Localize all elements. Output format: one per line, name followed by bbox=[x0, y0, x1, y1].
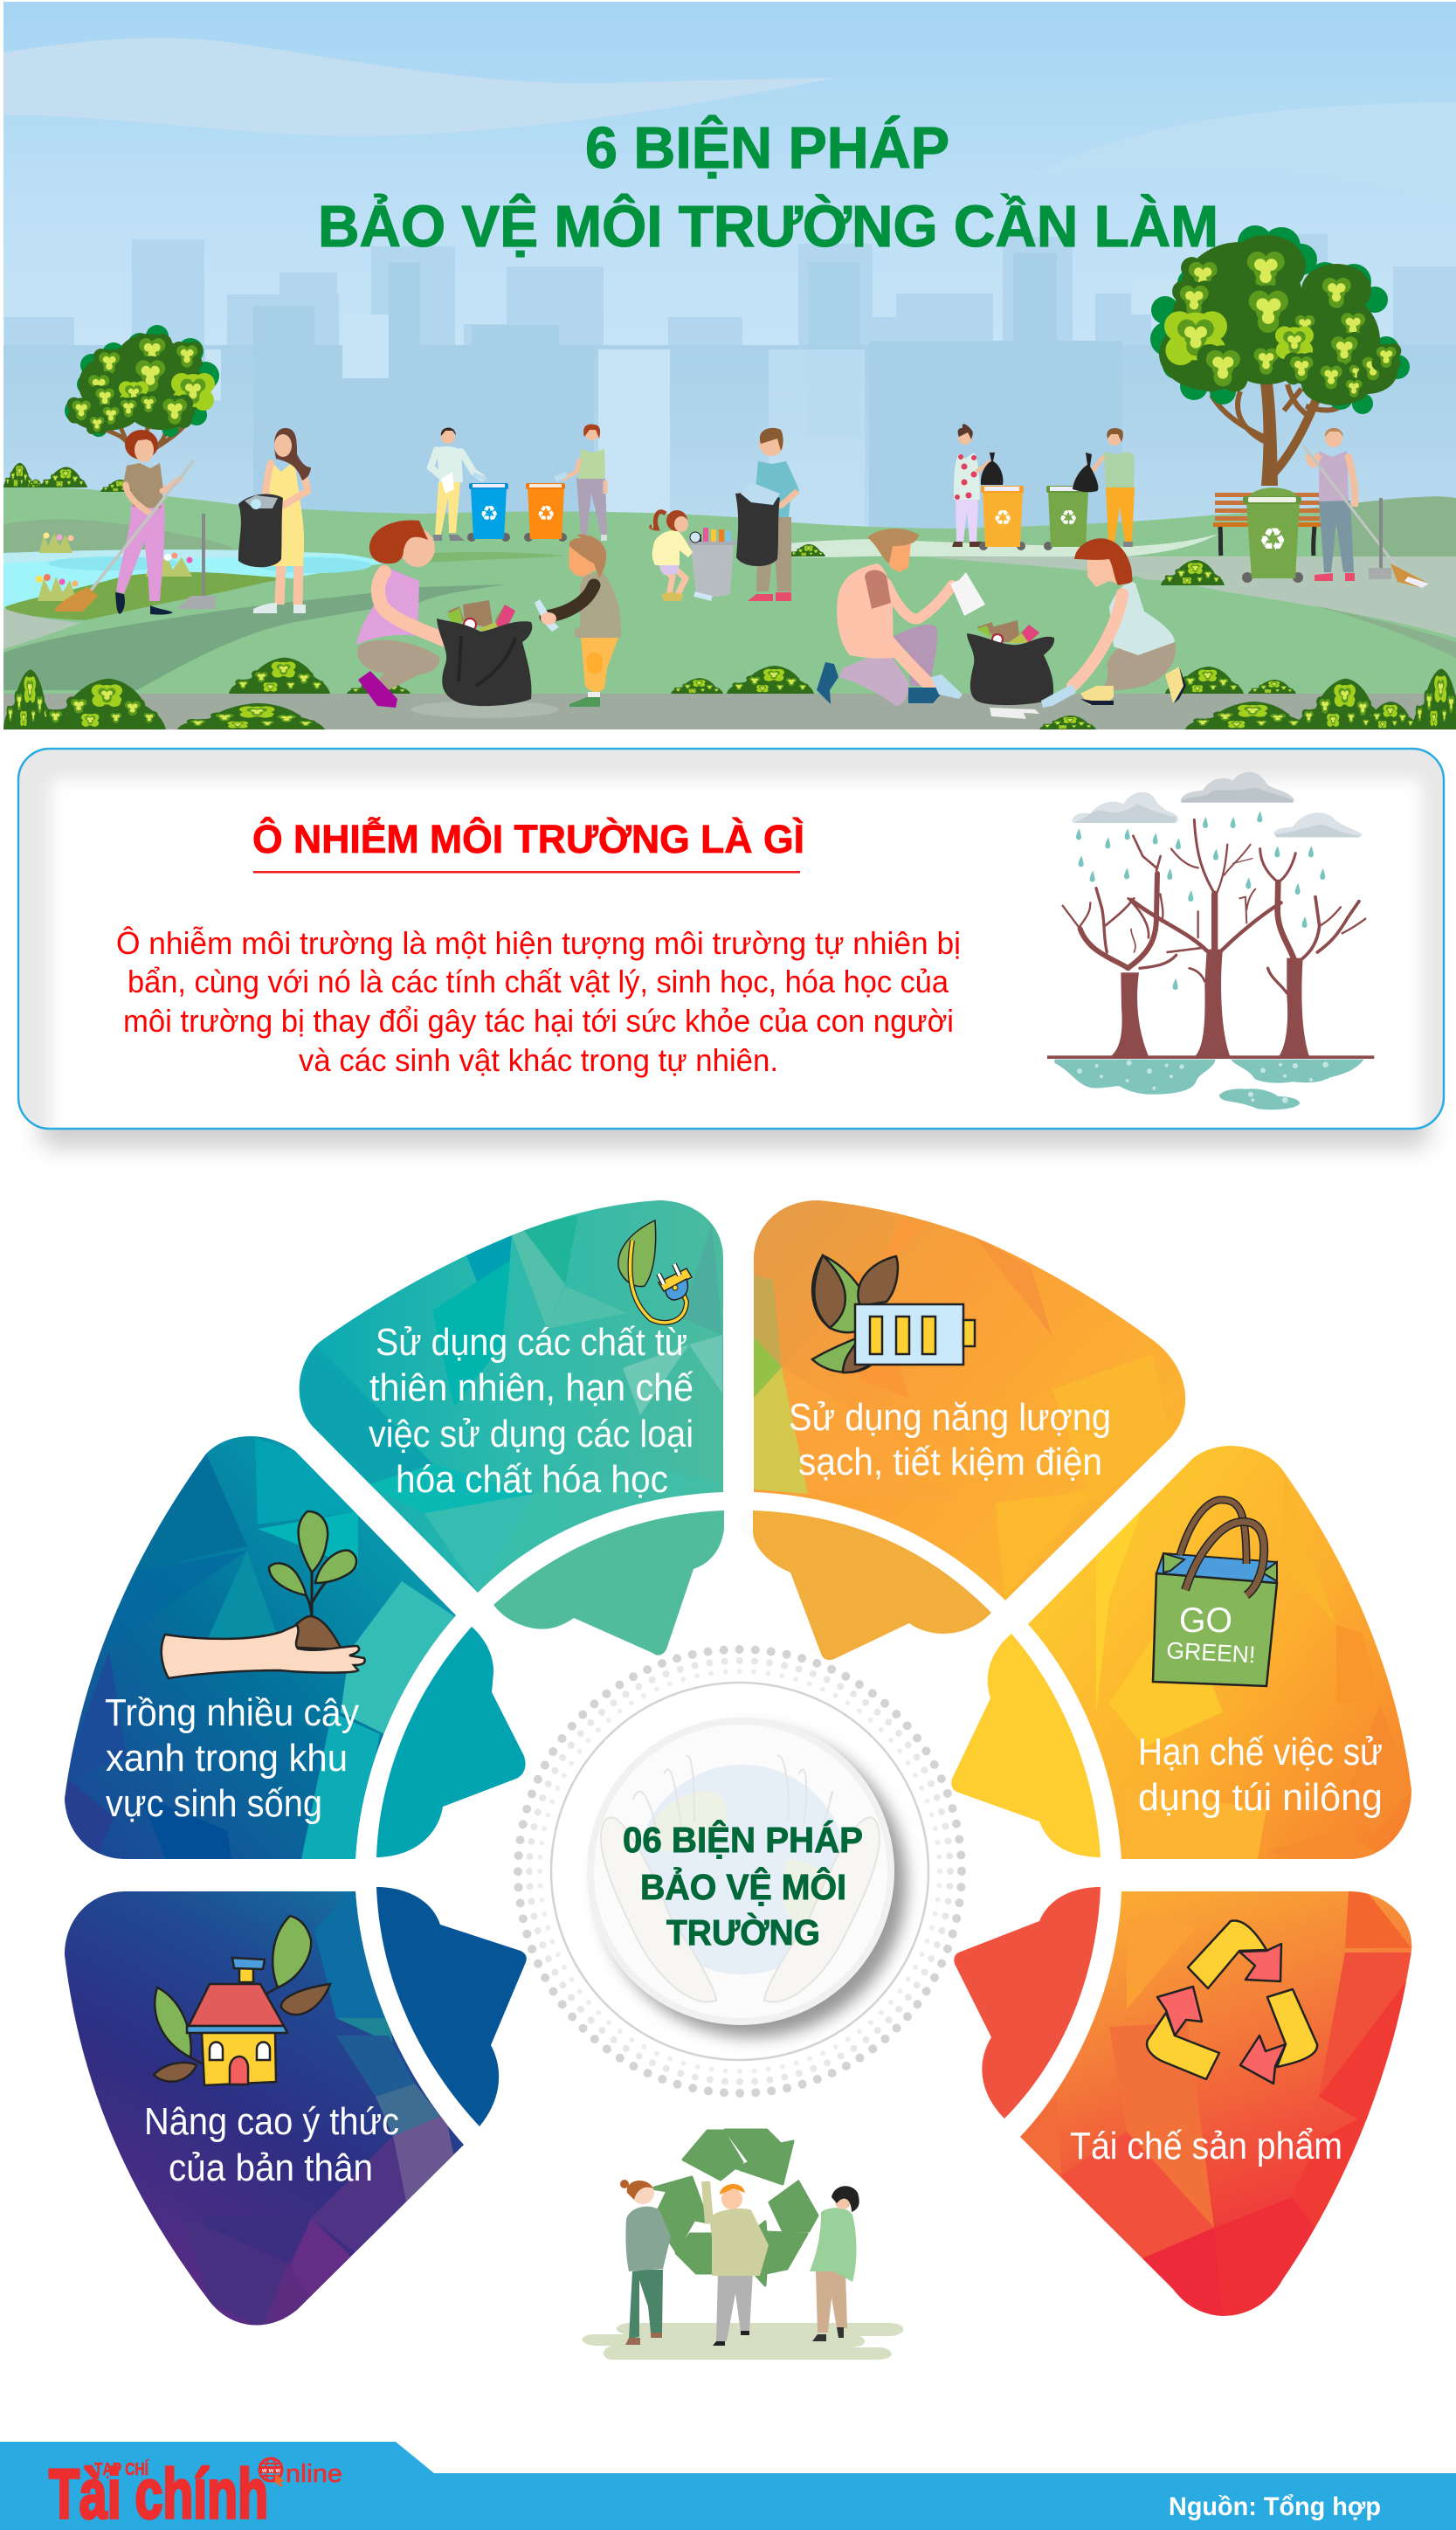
panel: limit plastic bags bbox=[951, 1441, 1415, 1861]
person: crouching man bbox=[817, 529, 985, 706]
city skyline bbox=[3, 234, 1456, 529]
person left bbox=[620, 2180, 671, 2345]
icon: leaf and plug bbox=[618, 1220, 692, 1323]
sky background bbox=[3, 2, 1456, 345]
logo: online mark: nline bbox=[286, 2460, 342, 2488]
inner tab bbox=[951, 1634, 1101, 1857]
panel: what is pollution bbox=[18, 749, 1444, 1148]
text: plant more trees: vực sinh sống bbox=[106, 1782, 322, 1825]
bin: blue recycling: ♻ bbox=[480, 502, 499, 526]
left tree bbox=[65, 325, 219, 448]
text: nature-based substances bbox=[369, 1321, 693, 1501]
text: clean energy bbox=[789, 1396, 1111, 1483]
center heading bbox=[623, 1820, 863, 1953]
person: woman in green shirt bbox=[554, 425, 607, 541]
icon: leaves and battery bbox=[812, 1255, 975, 1372]
bin: large green recycling: ♻ bbox=[1259, 522, 1287, 557]
bench bbox=[1213, 493, 1321, 556]
inner tab bbox=[753, 1510, 991, 1660]
text: nature-based substances: Sử dụng các chất từ bbox=[376, 1321, 687, 1364]
dustpan bbox=[177, 514, 216, 609]
illustration: people holding recycling symbol bbox=[583, 2130, 903, 2360]
text: raise awareness: của bản thân bbox=[169, 2146, 373, 2189]
person: man with orange trousers bbox=[1073, 428, 1135, 547]
hills and lawn bbox=[3, 485, 1456, 729]
bin: orange recycling bbox=[524, 483, 567, 542]
footer bar bbox=[0, 2442, 1456, 2530]
inner tab bbox=[376, 1627, 526, 1857]
title: BẢO VỆ MÔI TRƯỜNG CẦN LÀM bbox=[318, 194, 1218, 259]
person: crouching woman bbox=[356, 521, 456, 708]
center heading: BẢO VỆ MÔI bbox=[640, 1867, 846, 1907]
icon: go green bag: GREEN! bbox=[1166, 1637, 1256, 1668]
text: limit plastic bags bbox=[1138, 1731, 1383, 1819]
body text: Ô nhiễm môi trường là một hiện tượng môi trường tự nhiên bị bbox=[116, 925, 961, 961]
text: raise awareness: Nâng cao ý thức bbox=[144, 2100, 399, 2143]
black bag and plastic bag bbox=[967, 620, 1054, 719]
panel: nature-based substances bbox=[288, 1197, 725, 1656]
bin: yellow recycling bbox=[979, 486, 1025, 550]
inner tab bbox=[954, 1887, 1101, 2119]
text: nature-based substances: hóa chất hóa học bbox=[396, 1458, 668, 1501]
logo: online mark: www bbox=[261, 2468, 281, 2474]
title bbox=[318, 115, 1218, 259]
bin: blue recycling bbox=[467, 483, 510, 542]
center heading: TRƯỜNG bbox=[666, 1912, 820, 1953]
bin: green recycling bbox=[1044, 486, 1092, 550]
text: clean energy: sạch, tiết kiệm điện bbox=[798, 1441, 1102, 1483]
person right bbox=[810, 2186, 859, 2341]
icon: go green bag: GO bbox=[1179, 1601, 1232, 1640]
title: 6 BIỆN PHÁP bbox=[585, 115, 949, 181]
text: recycle products: Tái chế sản phẩm bbox=[1070, 2125, 1342, 2167]
bin: orange recycling: ♻ bbox=[536, 502, 555, 526]
body text bbox=[116, 925, 961, 1078]
panel: plant more trees bbox=[61, 1433, 526, 1861]
source note: Nguồn: Tổng hợp bbox=[1169, 2492, 1381, 2521]
text: plant more trees: Trồng nhiều cây bbox=[105, 1691, 359, 1734]
plate bbox=[587, 1718, 894, 2025]
logo: magazine label: TẠP CHÍ bbox=[94, 2459, 148, 2479]
plate shadow bbox=[599, 1730, 907, 2037]
inner tab bbox=[376, 1887, 527, 2126]
center heading: 06 BIỆN PHÁP bbox=[623, 1820, 863, 1860]
panel: hero park scene bbox=[3, 2, 1456, 729]
icon: go green bag bbox=[1153, 1500, 1277, 1686]
inner tab bbox=[493, 1510, 724, 1656]
center badge bbox=[518, 1649, 962, 2093]
text: raise awareness bbox=[144, 2100, 399, 2189]
text: limit plastic bags: dụng túi nilông bbox=[1138, 1776, 1383, 1819]
clouds bbox=[3, 38, 1456, 136]
text: nature-based substances: thiên nhiên, hạn chế bbox=[369, 1366, 693, 1409]
logo: online mark bbox=[259, 2458, 342, 2488]
icon: recycling arrows bbox=[1147, 1920, 1317, 2084]
text: clean energy: Sử dụng năng lượng bbox=[789, 1396, 1111, 1439]
recycling symbol bbox=[652, 2130, 818, 2285]
dotted rings bbox=[518, 1649, 962, 2093]
person: woman in yellow dress with black bag bbox=[238, 428, 311, 613]
body text: môi trường bị thay đổi gây tác hại tới sức khỏe của con người bbox=[123, 1003, 954, 1039]
person: man with broom bbox=[1303, 428, 1429, 588]
panel: clean energy bbox=[751, 1197, 1188, 1660]
bin: green recycling: ♻ bbox=[1059, 507, 1078, 530]
person center bbox=[706, 2181, 769, 2346]
person: girl and trash can bbox=[652, 510, 736, 601]
heading underline bbox=[253, 871, 800, 874]
text: plant more trees: xanh trong khu bbox=[106, 1737, 348, 1780]
icon: rain and bare trees bbox=[1047, 772, 1374, 1109]
person: woman with broom bbox=[54, 430, 194, 615]
person: man in blue with black bag bbox=[735, 428, 799, 601]
body text: và các sinh vật khác trong tự nhiên. bbox=[299, 1042, 778, 1078]
bin: large green recycling bbox=[1242, 487, 1303, 583]
person: woman with polka dress bbox=[952, 424, 1003, 547]
black bag with rubbish bbox=[437, 600, 532, 706]
person: child with bottle bbox=[535, 535, 621, 707]
panel: recycle products bbox=[954, 1887, 1415, 2319]
globe and hands bbox=[601, 1756, 880, 2002]
text: limit plastic bags: Hạn chế việc sử bbox=[1138, 1731, 1383, 1773]
person: man with recycling bbox=[431, 427, 487, 541]
ground bbox=[583, 2323, 903, 2360]
icon: hand holding sapling bbox=[162, 1511, 365, 1678]
bushes bbox=[3, 463, 1456, 729]
person: crouching woman right bbox=[1041, 538, 1186, 708]
icon: house with leaves bbox=[154, 1916, 330, 2085]
right tree bbox=[1150, 225, 1410, 486]
card heading: Ô NHIỄM MÔI TRƯỜNG LÀ GÌ bbox=[252, 817, 804, 861]
bin: yellow recycling: ♻ bbox=[993, 507, 1012, 530]
text: plant more trees bbox=[105, 1691, 359, 1825]
body text: bẩn, cùng với nó là các tính chất vật lý, sinh học, hóa học của bbox=[128, 964, 949, 999]
flowers by the pond bbox=[36, 533, 192, 601]
text: nature-based substances: việc sử dụng các loại bbox=[369, 1413, 693, 1455]
panel: raise awareness bbox=[61, 1887, 527, 2333]
